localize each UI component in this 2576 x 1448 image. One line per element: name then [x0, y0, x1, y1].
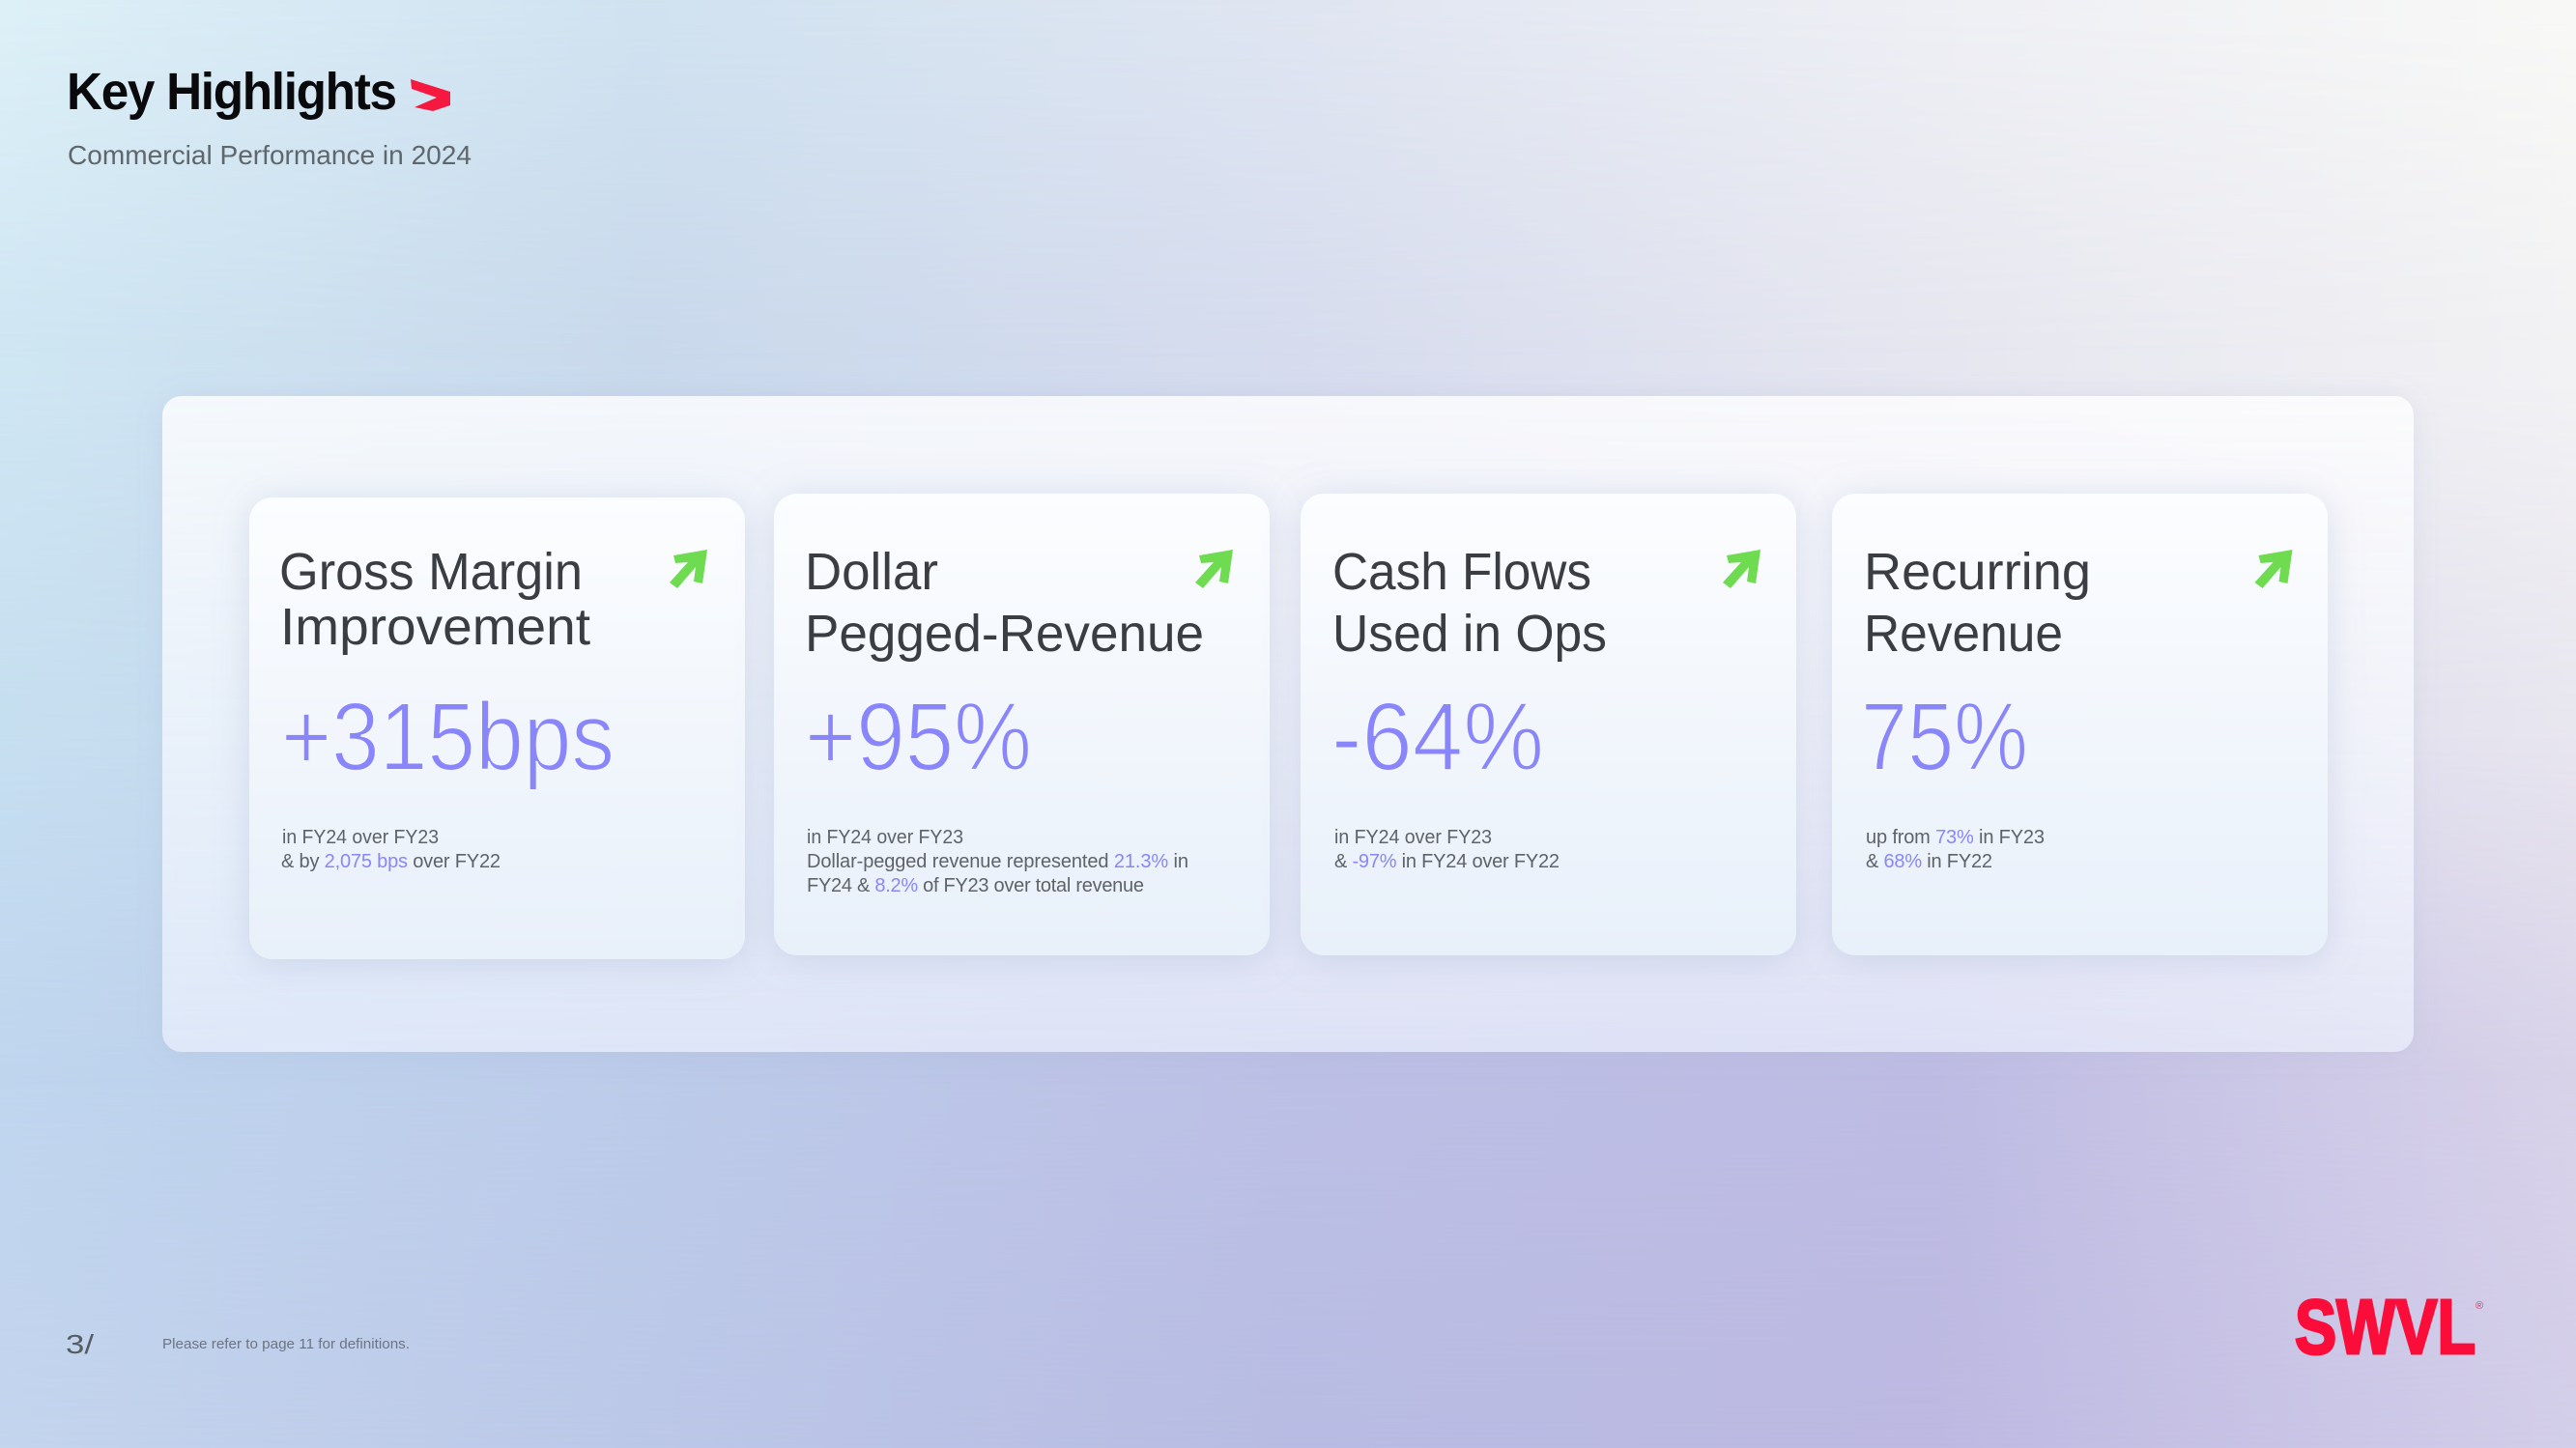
description: in FY24 over FY23 [1334, 827, 1492, 848]
subtitle: Commercial Performance in 2024 [68, 140, 472, 170]
footnote: Please refer to page 11 for definitions. [162, 1336, 410, 1352]
metric value: +315bps [281, 683, 615, 791]
card title: Revenue [1864, 605, 2063, 663]
card title: Recurring [1864, 543, 2091, 601]
card title: Used in Ops [1332, 605, 1607, 663]
description: up from 73% in FY23 [1866, 827, 2045, 848]
card title: Pegged-Revenue [805, 605, 1204, 663]
icon: up arrow [1195, 550, 1233, 588]
card title: Cash Flows [1332, 543, 1591, 601]
description: & by 2,075 bps over FY22 [281, 851, 501, 872]
description: FY24 & 8.2% of FY23 over total revenue [807, 875, 1144, 896]
logo: swvl: SWVL [2295, 1284, 2476, 1370]
description: in FY24 over FY23 [282, 827, 439, 848]
icon: title chevron [411, 79, 450, 111]
card title [1332, 543, 1607, 663]
card title [805, 543, 1204, 663]
card title: Dollar [805, 543, 938, 601]
card title [1864, 543, 2091, 663]
metric value: -64% [1331, 683, 1544, 791]
card: gross margin [249, 497, 745, 959]
description: & 68% in FY22 [1866, 851, 1992, 872]
description: in FY24 over FY23 [807, 827, 963, 848]
card title: Gross Margin [279, 543, 583, 601]
description [1334, 827, 1560, 872]
title: Key Highlights [67, 63, 397, 121]
description [281, 827, 501, 872]
description [807, 827, 1188, 896]
card title [279, 543, 590, 656]
card title: Improvement [280, 598, 590, 656]
icon: up arrow [670, 550, 707, 588]
page number: 3/ [66, 1329, 94, 1359]
logo: swvl: ® [2476, 1300, 2483, 1312]
icon: up arrow [1723, 550, 1760, 588]
panel: highlights [162, 396, 2414, 1052]
description [1866, 827, 2045, 872]
metric value: +95% [805, 683, 1032, 791]
description: Dollar-pegged revenue represented 21.3% in [807, 851, 1188, 872]
card: cash flows [1301, 494, 1796, 955]
description: & -97% in FY24 over FY22 [1334, 851, 1560, 872]
icon: up arrow [2255, 550, 2292, 588]
card: recurring revenue [1832, 494, 2328, 955]
metric value: 75% [1861, 683, 2028, 791]
card: dollar pegged revenue [774, 494, 1270, 955]
